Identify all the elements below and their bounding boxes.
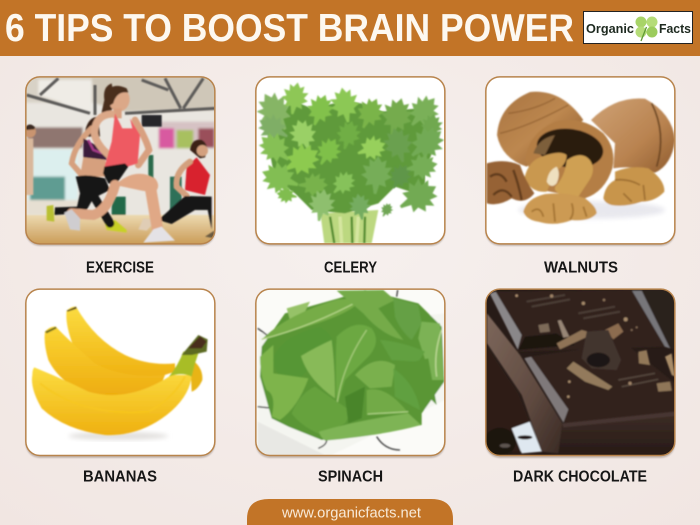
header banner (0, 0, 700, 56)
front face (560, 416, 674, 445)
panel: walnuts (485, 76, 676, 246)
front banana (32, 367, 192, 435)
panel: exercise (24, 76, 216, 246)
stalks (320, 210, 378, 243)
left person (26, 128, 36, 138)
small rear banana (190, 358, 202, 392)
panel: bananas (25, 288, 216, 458)
plate (258, 313, 445, 457)
footer pill (247, 499, 453, 525)
left kernel (487, 161, 534, 204)
logo: Organic Facts: Organic (586, 22, 634, 36)
panel: dark chocolate (484, 288, 676, 458)
panel: celery (250, 76, 451, 246)
lower bar surface (525, 343, 675, 423)
kernels inside (524, 153, 567, 192)
leaf mass (270, 100, 432, 213)
back woman (84, 117, 100, 137)
back banana (66, 307, 175, 379)
leaves (287, 302, 310, 320)
right kernel (603, 167, 664, 206)
logo: Organic Facts: Facts (659, 22, 691, 36)
label: exercise: EXERCISE (86, 260, 154, 276)
side face (487, 313, 562, 453)
title: 6 TIPS TO BOOST BRAIN POWER (5, 7, 574, 50)
label: bananas: BANANAS (83, 468, 157, 486)
label: spinach: SPINACH (318, 468, 383, 486)
open shell (525, 120, 613, 198)
chunks (557, 330, 588, 349)
stem (169, 348, 200, 377)
label: celery: CELERY (324, 260, 377, 276)
right woman (190, 140, 207, 158)
shell right (591, 98, 675, 173)
base foliage (260, 290, 444, 440)
back bars (634, 290, 671, 348)
label: dark chocolate: DARK CHOCOLATE (513, 468, 647, 486)
upper bar surface (490, 290, 665, 352)
website url: www.organicfacts.net (281, 506, 421, 522)
bottom kernel (523, 193, 597, 224)
panel: spinach (255, 288, 446, 458)
foil (512, 422, 542, 453)
label: walnuts: WALNUTS (544, 260, 618, 276)
main woman (101, 83, 115, 115)
logo: Organic Facts (584, 12, 692, 44)
shell left (497, 92, 583, 167)
middle banana (45, 327, 165, 396)
